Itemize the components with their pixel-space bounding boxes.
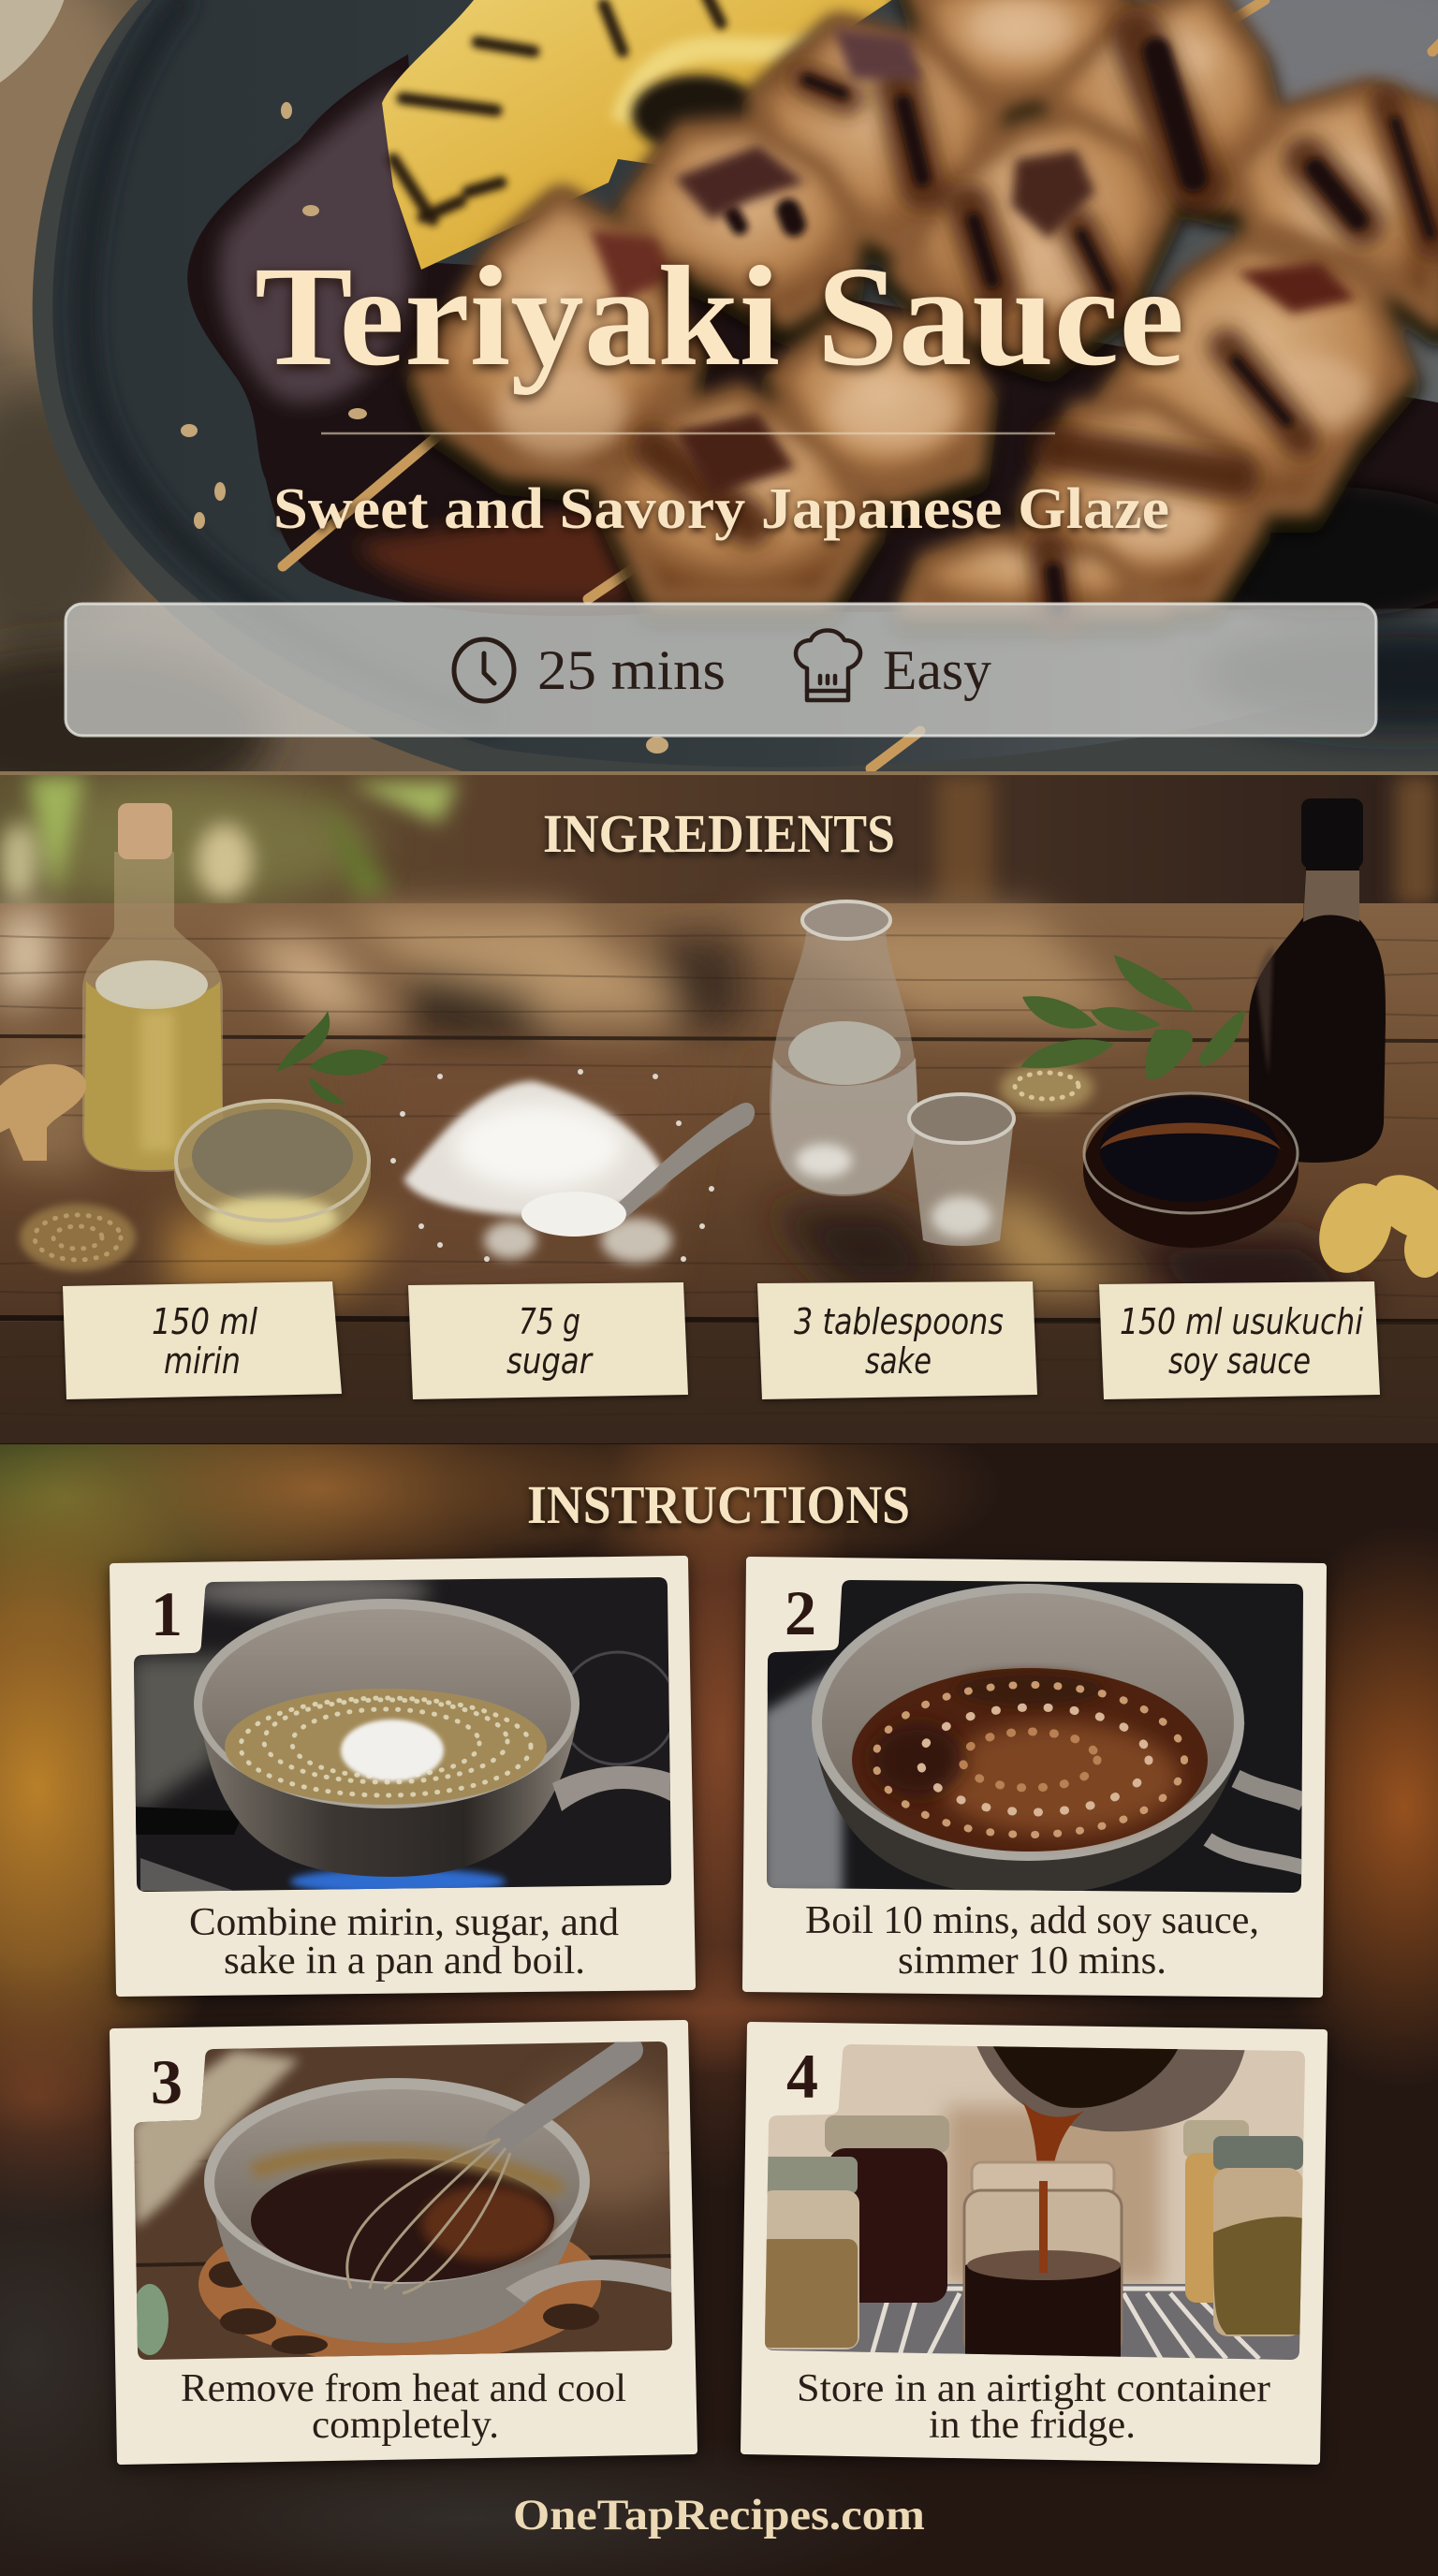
chicken pieces: [421, 0, 1438, 620]
subtitle: Sweet and Savory Japanese Glaze: [273, 477, 1169, 541]
step text: Combine mirin, sugar, and: [189, 1901, 619, 1944]
leaves left: [276, 1011, 389, 1105]
prep time: 25 mins: [537, 639, 726, 701]
sesame pile left: [20, 1204, 136, 1271]
sake carafe: [770, 901, 917, 1196]
sake glass: [909, 1094, 1014, 1246]
step text: Boil 10 mins, add soy sauce,: [805, 1899, 1259, 1942]
note: soy sauce: 150 ml usukuchi: [1120, 1301, 1363, 1342]
note: sugar: sugar: [506, 1340, 594, 1382]
step text: [181, 2367, 626, 2447]
difficulty: Easy: [883, 639, 991, 701]
step text: [189, 1901, 619, 1983]
photo: sauce boiling in a pot: [763, 1577, 1306, 1895]
step text: [805, 1899, 1259, 1983]
photo: pot on a gas burner: [131, 1571, 679, 1895]
step text: sake in a pan and boil.: [224, 1939, 585, 1983]
sugar pile: [390, 1069, 714, 1263]
section border: [0, 771, 1438, 776]
mirin bottle: [82, 803, 223, 1172]
sesame pile right: [1000, 1063, 1093, 1112]
blurred kitchen background: [0, 1292, 1438, 2576]
step card 4: [744, 2026, 1324, 2461]
note: soy sauce: [1099, 1281, 1380, 1399]
step card 2: [746, 1560, 1323, 1994]
sesame seeds: [181, 102, 668, 754]
step card 1: [113, 1559, 692, 1993]
info bar: time and difficulty: [66, 604, 1376, 736]
spoon: [521, 1103, 755, 1237]
hero photo: grilled chicken skewers on a plate: [0, 0, 1438, 814]
step number: 3: [151, 2046, 183, 2117]
soy sauce bottle: [1249, 798, 1386, 1163]
soy sauce bowl: [1083, 1092, 1299, 1248]
step number: 1: [151, 1578, 183, 1649]
divider line: [321, 432, 1055, 434]
heading: instructions: INSTRUCTIONS: [527, 1474, 910, 1535]
sauce pool: [187, 54, 1438, 616]
ginger root left: [0, 1064, 86, 1161]
pineapple ring: [382, 0, 899, 270]
step text: Remove from heat and cool: [181, 2367, 626, 2410]
note: sake: [757, 1281, 1037, 1399]
ginger slices right: [1305, 1162, 1438, 1285]
note: sake: 3 tablespoons: [794, 1301, 1004, 1342]
leaves right: [1020, 955, 1245, 1079]
step number: 2: [785, 1577, 816, 1648]
ingredients photo: bottles and bowls on a wooden table: [0, 775, 1438, 1446]
step text: simmer 10 mins.: [898, 1939, 1167, 1983]
heading: ingredients: INGREDIENTS: [543, 803, 895, 864]
mirin bowl: [174, 1099, 371, 1245]
title: Teriyaki Sauce: [255, 238, 1184, 396]
note: mirin: mirin: [164, 1340, 241, 1382]
skewers: [283, 0, 1438, 768]
note: mirin: 150 ml: [152, 1301, 257, 1342]
step card 3: [113, 2024, 694, 2461]
note: sugar: [408, 1282, 688, 1399]
panel: instructions: [0, 1292, 1438, 2576]
step number: 4: [786, 2041, 818, 2112]
grill marks and glaze: [655, 37, 1432, 618]
step text: [797, 2367, 1270, 2447]
panel: hero: [0, 0, 1438, 814]
step text: completely.: [312, 2404, 499, 2447]
note: mirin: [63, 1281, 342, 1399]
photo: whisk in a cooling pan: [131, 2039, 693, 2364]
photo: pouring sauce into a jar in the fridge: [760, 2041, 1308, 2364]
note: sugar: 75 g: [519, 1301, 580, 1342]
step text: Store in an airtight container: [797, 2367, 1270, 2410]
note: soy sauce: soy sauce: [1168, 1340, 1311, 1382]
panel: ingredients: [0, 771, 1438, 1446]
step text: in the fridge.: [929, 2404, 1136, 2447]
note: sake: sake: [865, 1340, 932, 1382]
footer website: OneTapRecipes.com: [513, 2491, 925, 2539]
icon: chef hat: [796, 630, 860, 700]
icon: clock: [454, 639, 514, 701]
